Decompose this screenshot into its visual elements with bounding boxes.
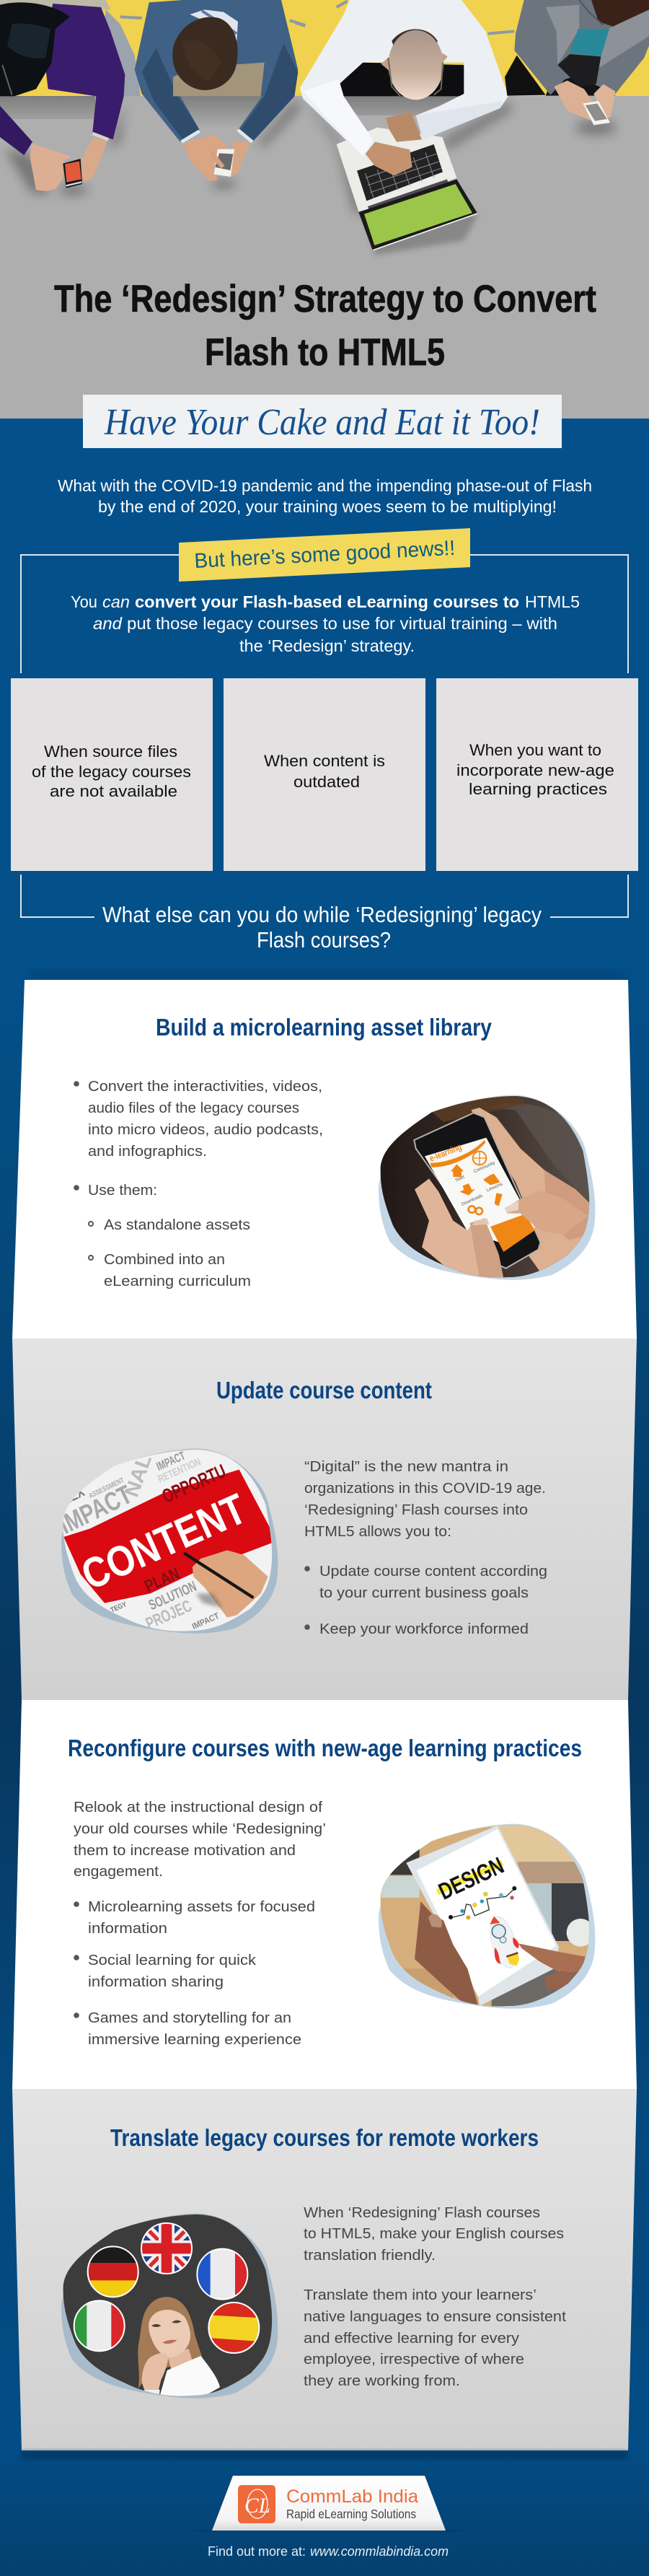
card: new-age practices — [436, 678, 638, 871]
footer logo: CommLab India: Rapid eLearning Solutions — [286, 2507, 416, 2521]
photo: hands holding phone — [379, 1095, 596, 1280]
callout: good news banner — [179, 528, 470, 582]
section heading: what else: What else can you do while ‘Redesigning’ legacy — [102, 902, 542, 927]
photo: hands holding phone: e-learning — [428, 1142, 463, 1164]
flag: UK — [142, 2224, 191, 2273]
text block: translation friendly: Translate them into your learners’ — [304, 2287, 537, 2303]
body text: convert to HTML5: can — [102, 592, 130, 611]
bullet list: microlearning: Use them: — [88, 1182, 157, 1199]
photo: content word cloud: IMPACT — [55, 1479, 136, 1540]
body text: convert to HTML5: and — [93, 614, 123, 633]
title — [54, 278, 596, 374]
photo: content word cloud: IMPACT — [154, 1449, 187, 1473]
body text: convert to HTML5 — [71, 592, 580, 655]
text block: relook: your old courses while ‘Redesigning’ — [74, 1821, 326, 1837]
text block: relook — [74, 1799, 326, 2048]
flag: France — [198, 2250, 247, 2299]
intro text: What with the COVID-19 pandemic and the impending phase-out of Flash — [58, 476, 592, 495]
text block: relook: them to increase motivation and — [74, 1842, 296, 1859]
text block: translation friendly: employee, irrespective of where — [304, 2351, 524, 2367]
photo: content word cloud: PROJEC — [143, 1596, 195, 1633]
card: source files: of the legacy courses — [32, 763, 191, 781]
bullet list: microlearning: audio files of the legacy courses — [88, 1100, 299, 1116]
text block: translation friendly: to HTML5, make your English courses — [304, 2225, 564, 2242]
photo: content word cloud: ASSESSMENT — [87, 1476, 125, 1500]
header photo: team at table seen from above — [0, 0, 649, 419]
text block: relook: information sharing — [88, 1973, 224, 1990]
card: outdated content — [224, 678, 425, 871]
text block: relook: Games and storytelling for an — [88, 2010, 291, 2026]
body text: convert to HTML5: convert your Flash-based eLearning courses to — [135, 592, 519, 611]
text block: translation friendly: and effective learning for every — [304, 2330, 520, 2347]
body text: convert to HTML5: the ‘Redesign’ strategy. — [239, 636, 415, 655]
card: new-age practices: learning practices — [469, 780, 607, 798]
bullet list: microlearning: Combined into an — [104, 1251, 225, 1268]
text block: digital mantra: “Digital” is the new mantra in — [304, 1458, 508, 1475]
section heading: what else: Flash courses? — [257, 927, 391, 952]
text block: digital mantra: HTML5 allows you to: — [304, 1523, 451, 1540]
body text: convert to HTML5: put those legacy courses to use for virtual training – with — [127, 614, 557, 633]
card: outdated content: outdated — [293, 773, 360, 791]
card: source files: When source files — [44, 742, 177, 761]
photo: hands holding phone: Lessons — [486, 1182, 503, 1193]
bullet list: microlearning: and infographics. — [88, 1143, 207, 1160]
flag: Germany — [88, 2247, 138, 2296]
panel: microlearning asset library — [12, 980, 637, 1339]
text block: digital mantra: Keep your workforce informed — [319, 1621, 529, 1637]
photo: tablet showing design: DESIGN — [434, 1852, 508, 1905]
callout: good news banner: But here’s some good news!! — [194, 537, 456, 573]
text block: digital mantra — [304, 1458, 547, 1637]
intro text — [58, 476, 592, 516]
bullet list: microlearning: into micro videos, audio podcasts, — [88, 1121, 323, 1138]
text block: relook: Microlearning assets for focused — [88, 1898, 315, 1915]
photo: content word cloud: IMPACT — [190, 1611, 221, 1631]
photo: hands holding phone: Start — [454, 1175, 466, 1183]
flag: Italy — [75, 2301, 124, 2351]
body text: convert to HTML5: You — [71, 592, 97, 611]
text block: translation friendly: translation friendly. — [304, 2247, 436, 2264]
panel: update course content — [12, 1339, 637, 1700]
text block: digital mantra: ‘Redesigning’ Flash courses into — [304, 1502, 528, 1518]
heading: translate: Translate legacy courses for remote workers — [110, 2124, 539, 2151]
bullet list: microlearning: As standalone assets — [104, 1217, 250, 1233]
title: Flash to HTML5 — [205, 331, 445, 374]
text block: digital mantra: organizations in this COVID-19 age. — [304, 1480, 546, 1497]
photo: content word cloud: OPPORTU — [159, 1460, 229, 1507]
card: new-age practices: When you want to — [469, 741, 601, 759]
photo: content word cloud: CONTENT — [74, 1484, 253, 1599]
text block: relook: engagement. — [74, 1863, 163, 1880]
panel: translate legacy courses — [12, 2089, 637, 2450]
heading: microlearning: Build a microlearning asset library — [156, 1014, 493, 1041]
text block: translation friendly — [304, 2204, 566, 2389]
heading: update: Update course content — [216, 1377, 432, 1403]
photo: hands holding phone: Downloads — [461, 1193, 483, 1207]
woman thinking — [138, 2297, 220, 2397]
photo: content word cloud: SOLUTION — [146, 1579, 199, 1613]
card: source files — [11, 678, 213, 871]
photo: hands holding phone: Community — [473, 1160, 496, 1174]
photo: content word cloud: NAL — [120, 1452, 156, 1500]
text block: digital mantra: to your current business goals — [319, 1585, 529, 1601]
section heading: what else — [102, 902, 542, 952]
card: source files: are not available — [50, 782, 177, 800]
bullet list: microlearning: Convert the interactivities, videos, — [88, 1078, 322, 1095]
person 2: blue sweater with phone — [120, 0, 305, 181]
footer link: www.commlabindia.com — [310, 2544, 449, 2559]
text block: translation friendly: native languages to ensure consistent — [304, 2308, 566, 2325]
text block: relook: information — [88, 1920, 167, 1937]
panel: reconfigure courses — [12, 1700, 637, 2089]
footer logo: CommLab India: CommLab India — [286, 2487, 418, 2507]
text block: relook: immersive learning experience — [88, 2031, 301, 2048]
photo: content word cloud: PLAN — [141, 1564, 182, 1595]
text block: digital mantra: Update course content according — [319, 1563, 547, 1580]
text block: translation friendly: they are working from. — [304, 2373, 460, 2389]
bullet list: microlearning — [74, 1078, 323, 1289]
photo: woman and flags — [61, 2214, 278, 2398]
photo: tablet showing design — [379, 1824, 596, 2009]
icon: CL logo mark: CL — [244, 2494, 270, 2518]
subtitle banner: Have Your Cake and Eat it Too! — [104, 402, 540, 443]
text block: translation friendly: When ‘Redesigning’ Flash courses — [304, 2204, 540, 2221]
footer link — [208, 2544, 449, 2559]
text block: relook: Social learning for quick — [88, 1952, 257, 1968]
person 1: purple sweater with phone — [0, 0, 141, 191]
icon: CL logo mark — [238, 2485, 275, 2523]
body text: convert to HTML5: HTML5 — [525, 592, 580, 611]
photo: content word cloud: RETENTION — [156, 1456, 203, 1486]
footer logo: CommLab India — [195, 2476, 462, 2531]
photo: content word cloud: TEGY — [110, 1600, 128, 1615]
person 3: white shirt with laptop — [296, 0, 514, 255]
bullet list: microlearning: eLearning curriculum — [104, 1273, 251, 1289]
card: new-age practices: incorporate new-age — [456, 761, 614, 779]
photo: content word cloud — [61, 1449, 278, 1634]
flag: Spain — [209, 2303, 258, 2352]
photo: content word cloud: LEX — [61, 1484, 87, 1507]
intro text: by the end of 2020, your training woes seem to be multiplying! — [98, 497, 557, 516]
person 4: grey blazer with phone — [505, 0, 649, 125]
text block: relook: Relook at the instructional design of — [74, 1799, 322, 1815]
card: outdated content: When content is — [264, 752, 385, 770]
footer link: Find out more at: — [208, 2544, 306, 2559]
